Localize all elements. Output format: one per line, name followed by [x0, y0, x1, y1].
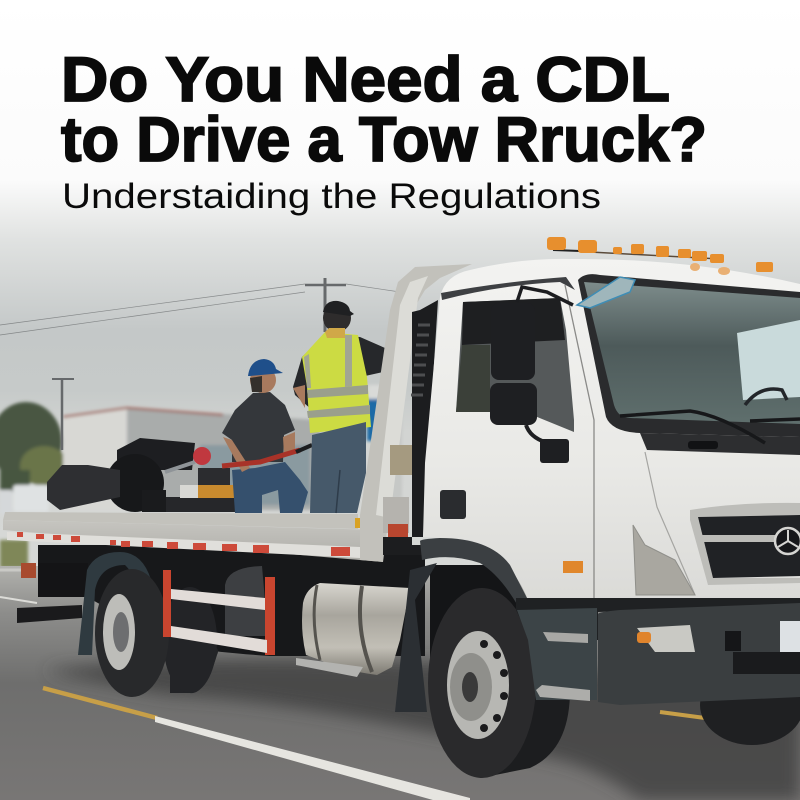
flatbed deck: [3, 512, 383, 562]
bumper and steps: [516, 598, 800, 705]
headlight: [633, 525, 695, 595]
front wheels: [428, 588, 800, 778]
truck chassis and rear wheels: [17, 545, 425, 697]
wheel arch and mudflap: [395, 538, 529, 712]
mirrors: [490, 287, 573, 463]
wiper blades: [620, 411, 800, 443]
title: to Drive a Tow Rruck?: [61, 105, 707, 175]
utility poles and wires: [0, 278, 400, 450]
background trees, building and van: [0, 385, 404, 568]
headboard upright: [360, 264, 472, 562]
title: [61, 45, 707, 175]
worker kneeling with blue cap: [222, 359, 312, 513]
subtitle: Understaiding the Regulations: [62, 177, 601, 216]
road: [0, 566, 800, 800]
truck cab: [423, 259, 800, 602]
grille and emblem: [690, 503, 800, 585]
title: Do You Need a CDL: [61, 45, 670, 115]
worker in hi-vis vest: [293, 301, 385, 513]
load on bed: winch equipment: [47, 438, 235, 512]
blue wind deflector: [577, 277, 635, 308]
sky background: [0, 0, 800, 600]
amber roof lights: [547, 237, 773, 275]
